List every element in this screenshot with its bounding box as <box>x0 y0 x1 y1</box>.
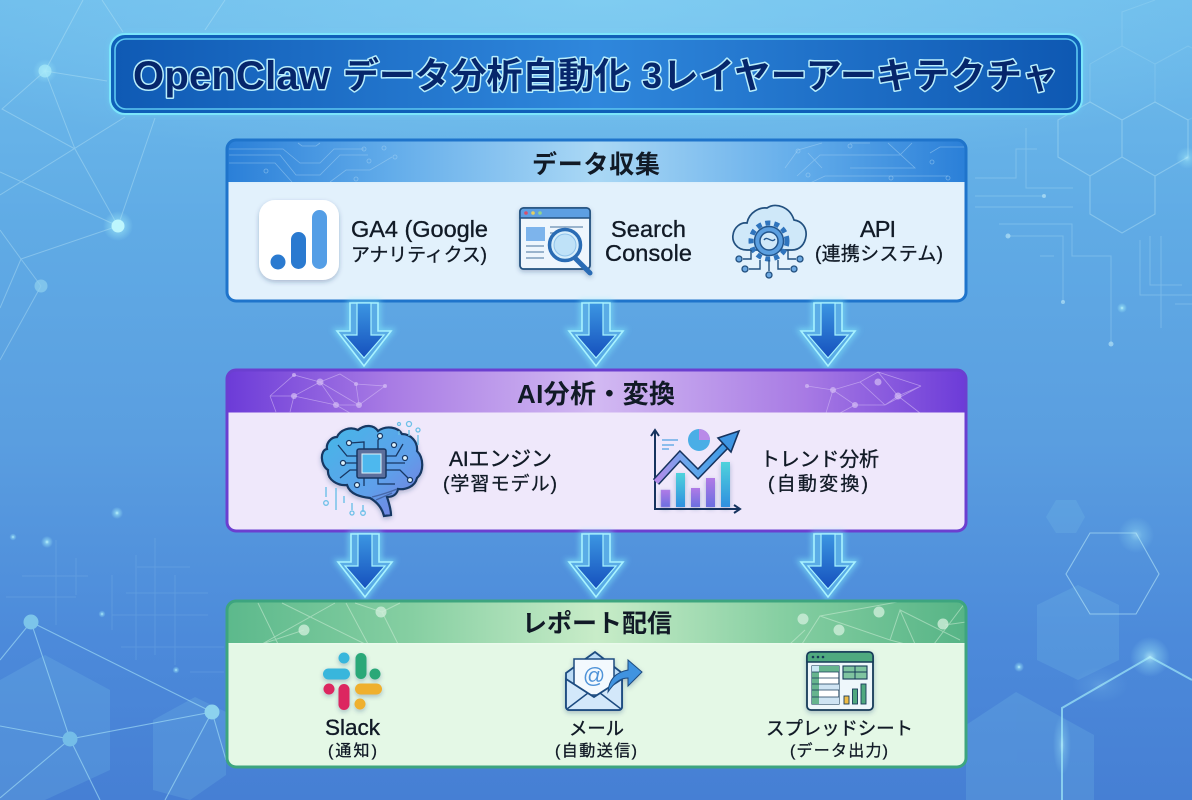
arrows: data collection to AI analysis <box>337 303 855 366</box>
heading: AI analysis: AI分析・変換 <box>517 379 675 409</box>
icon: mail: @ <box>583 663 605 688</box>
label: AI engine: AIエンジン <box>449 448 552 471</box>
label: AI engine: (学習モデル) <box>443 473 557 495</box>
label: trend analysis <box>760 448 879 495</box>
label: API: (連携システム) <box>815 243 943 265</box>
label: GA4 <box>351 216 488 266</box>
icon: mail <box>566 652 642 710</box>
title banner: 3レイヤーアーキテクチャ <box>642 55 1058 96</box>
label: Slack: (通知) <box>328 742 377 760</box>
label: Search Console: Search <box>611 216 686 242</box>
header band: data collection <box>227 140 966 183</box>
label: trend analysis: (自動変換) <box>768 473 868 495</box>
icon: AI brain <box>322 422 422 516</box>
arrows: AI analysis to report delivery <box>338 534 855 597</box>
label: spreadsheet <box>766 718 913 760</box>
label: AI engine <box>443 448 557 495</box>
icon: Search Console <box>520 208 590 273</box>
label: spreadsheet: (データ出力) <box>790 741 888 760</box>
label: API <box>815 216 943 265</box>
header band: report delivery <box>227 601 990 644</box>
panel: AI analysis and conversion <box>227 370 966 531</box>
heading: report delivery: レポート配信 <box>522 610 672 638</box>
label: Search Console: Console <box>605 240 692 266</box>
header band: AI analysis <box>227 370 966 414</box>
label: mail <box>555 718 637 760</box>
icon: trend chart <box>651 429 740 513</box>
title banner: OpenClaw <box>133 54 331 98</box>
label: mail: メール <box>569 718 624 739</box>
label: Search Console <box>605 216 692 266</box>
label: Slack <box>325 715 381 760</box>
heading: data collection: データ収集 <box>532 150 660 179</box>
icon: API cloud <box>733 205 806 278</box>
label: trend analysis: トレンド分析 <box>760 448 879 471</box>
label: GA4: GA4 (Google <box>351 216 488 242</box>
label: spreadsheet: スプレッドシート <box>766 718 913 739</box>
title banner: データ分析自動化 <box>343 55 630 96</box>
icon: spreadsheet <box>807 652 873 710</box>
label: mail: (自動送信) <box>555 742 637 760</box>
label: API: API <box>860 216 896 242</box>
panel: report delivery <box>227 601 990 767</box>
label: Slack: Slack <box>325 715 381 740</box>
icon: GA4 <box>259 200 339 280</box>
title banner <box>110 34 1082 114</box>
panel: data collection <box>227 140 966 301</box>
icon: Slack <box>323 652 382 710</box>
label: GA4: アナリティクス) <box>351 244 487 266</box>
